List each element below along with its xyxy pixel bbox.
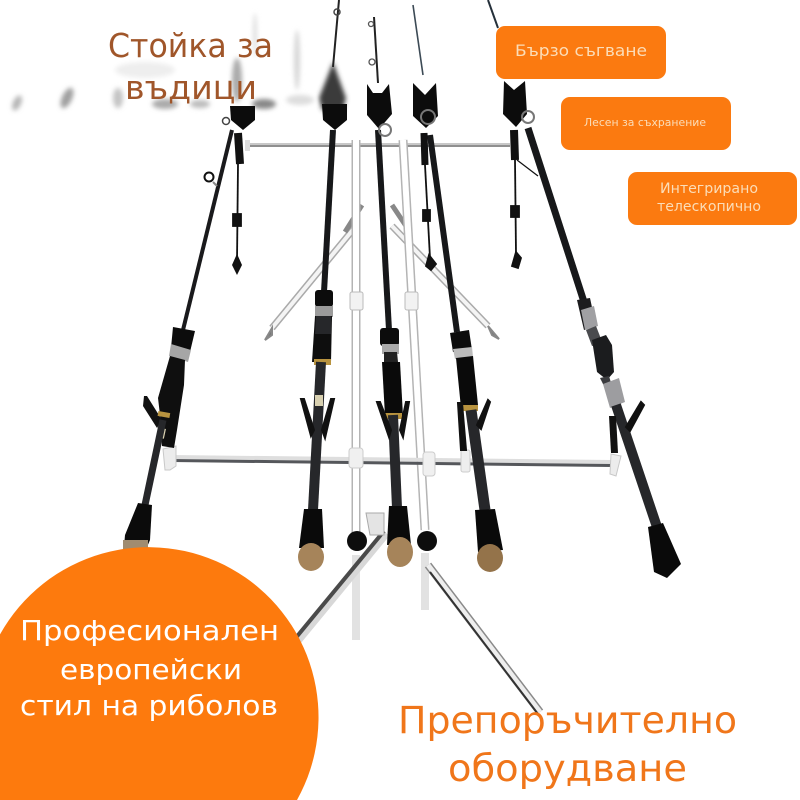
badge: integrated telescopic: Интегрирано xyxy=(660,181,758,197)
badge: quick fold: Бързо съгване xyxy=(515,41,647,60)
rod 5 xyxy=(488,0,681,578)
stand end knobs xyxy=(347,531,437,551)
badge: easy storage: Лесен за съхранение xyxy=(584,116,706,129)
title: Стойка за xyxy=(108,26,273,65)
rod 4 xyxy=(413,5,503,572)
smoky blurred rod tips xyxy=(10,13,346,112)
rod 3 xyxy=(368,17,413,567)
badge: integrated telescopic: телескопично xyxy=(657,199,761,215)
circle callout xyxy=(0,547,319,800)
circle callout: европейски xyxy=(60,653,242,686)
recommended equipment heading xyxy=(398,699,737,790)
title: въдици xyxy=(125,68,257,107)
recommended equipment heading: Препоръчително xyxy=(398,699,737,742)
badge: easy storage xyxy=(561,97,731,150)
alarm rings xyxy=(379,110,534,136)
badge: integrated telescopic xyxy=(628,172,797,225)
rod stand xyxy=(163,140,621,714)
recommended equipment heading: оборудване xyxy=(448,747,687,790)
rod 2 xyxy=(298,0,340,571)
bite alarms xyxy=(230,81,534,136)
vertical posts xyxy=(350,140,425,640)
title xyxy=(108,26,273,107)
upper stand legs xyxy=(265,205,499,340)
rod 1 xyxy=(123,118,232,549)
circle callout: стил на риболов xyxy=(20,689,278,722)
hanging bobbins xyxy=(233,130,538,273)
circle callout: Професионален xyxy=(20,614,279,647)
lower crossbar xyxy=(163,446,621,476)
badge: quick fold xyxy=(496,26,666,79)
alarm bodies xyxy=(230,81,527,130)
lower stand legs xyxy=(294,513,540,714)
upper crossbar xyxy=(245,140,510,151)
